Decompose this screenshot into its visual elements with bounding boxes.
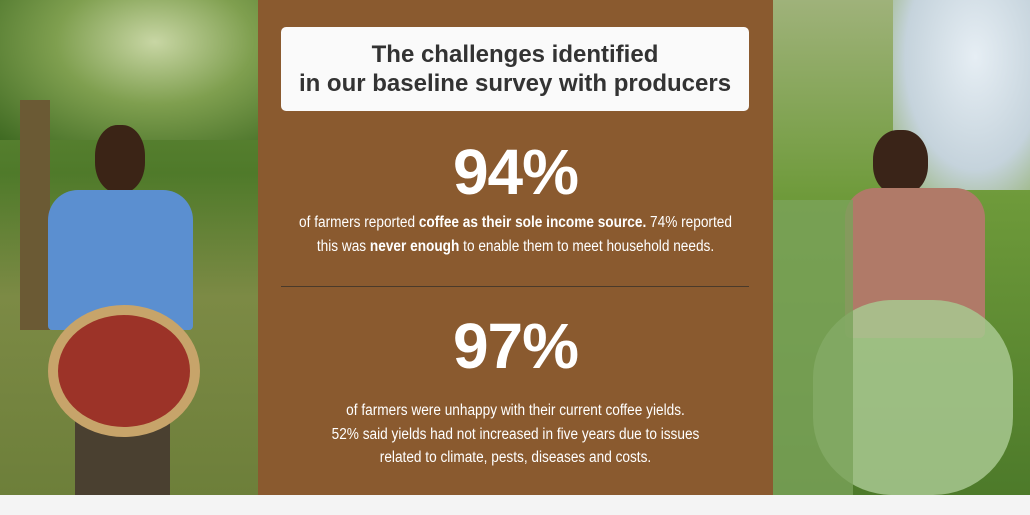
text block 2: related to climate, pests, diseases and costs. xyxy=(380,449,651,466)
stat 94%: 94% xyxy=(453,136,578,208)
text block 2 xyxy=(332,402,699,466)
stat 97%: 97% xyxy=(453,310,578,382)
title box: The challenges identified xyxy=(372,41,658,68)
title box: in our baseline survey with producers xyxy=(299,70,731,97)
text block 2: of farmers were unhappy with their current coffee yields. xyxy=(346,402,685,419)
text block 1 xyxy=(299,214,732,254)
panel: center brown xyxy=(258,0,773,495)
text block 2: 52% said yields had not increased in five years due to issues xyxy=(332,426,699,442)
photo: right farmer in field xyxy=(773,0,1030,495)
title box xyxy=(281,27,749,111)
text block 1: of farmers reported coffee as their sole income source. 74% reported xyxy=(299,214,732,231)
photo: left farmer with coffee basket xyxy=(0,0,258,495)
text block 1: this was never enough to enable them to meet household needs. xyxy=(317,238,714,254)
